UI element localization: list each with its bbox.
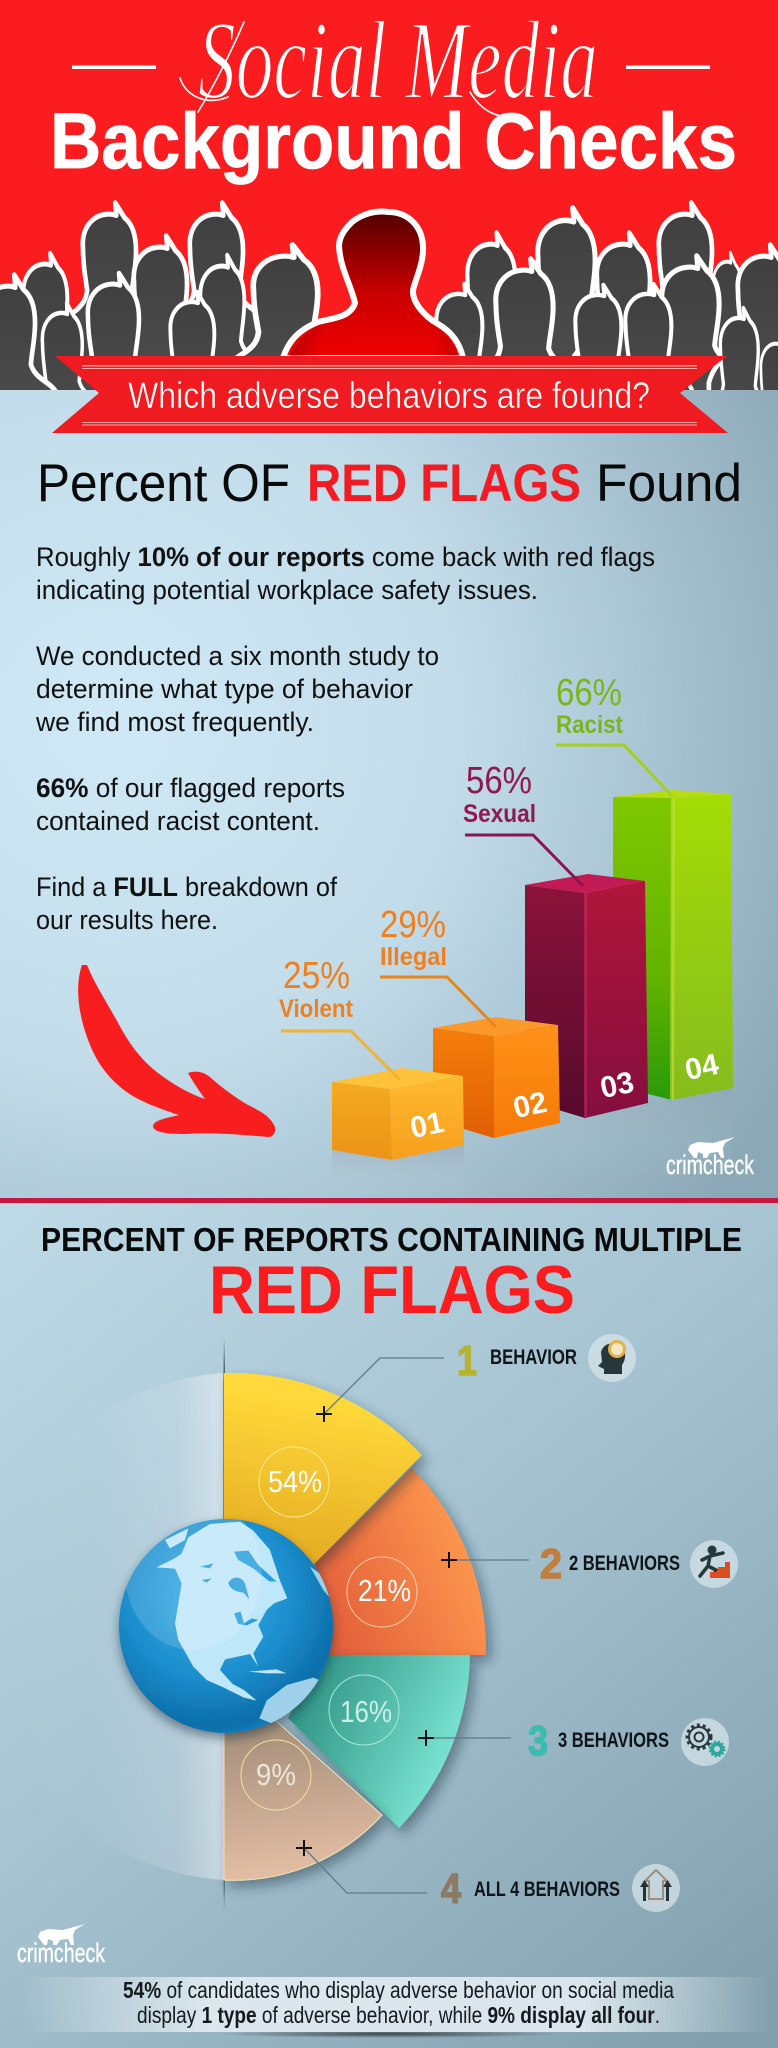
banner ribbon <box>52 356 728 433</box>
heading: red flags: RED FLAGS <box>209 1252 575 1328</box>
slice: 9 percent <box>224 1700 382 1880</box>
bar chart: red flag types <box>279 672 733 1195</box>
heading: percent of red flags found: Percent OF <box>37 454 290 513</box>
intro text block: Roughly 10% of our reports come back with red flags <box>36 542 655 572</box>
pie chart with globe <box>0 1337 486 1910</box>
label: 9 percent <box>241 1740 311 1810</box>
intro text block: determine what type of behavior <box>36 674 413 704</box>
callout: 25% violent: Violent <box>279 995 354 1023</box>
label: 9 percent: 9% <box>256 1757 296 1792</box>
callout: 56% sexual: Sexual <box>463 800 536 828</box>
legend: 2 behaviors: 2 BEHAVIORS <box>569 1552 680 1575</box>
callout: 29% illegal <box>380 904 496 1027</box>
bar reflections <box>332 1088 732 1195</box>
legend: 3 behaviors: 3 <box>528 1717 548 1764</box>
icon: upward arrows <box>632 1864 680 1912</box>
title decorative rules <box>72 66 710 69</box>
heading: percent of red flags found: RED FLAGS <box>307 454 581 513</box>
legend: 1 behavior: BEHAVIOR <box>490 1346 577 1369</box>
callout: 66% racist: Racist <box>556 711 624 739</box>
legend: all 4 behaviors: ALL 4 BEHAVIORS <box>474 1878 620 1901</box>
intro text block: our results here. <box>36 905 218 935</box>
bar 02 illegal <box>433 1017 560 1138</box>
title: Social Media <box>180 0 598 123</box>
bar 04 racist <box>613 790 733 1100</box>
slice: 54 percent <box>224 1373 422 1600</box>
crowd silhouettes <box>0 200 778 390</box>
footer note <box>20 1977 770 2032</box>
intro text block: indicating potential workplace safety issues. <box>36 575 538 605</box>
bar 03 sexual <box>525 874 648 1118</box>
section divider <box>0 1198 778 1203</box>
logo: crimcheck upper <box>666 1137 754 1180</box>
label: 16 percent <box>329 1675 399 1745</box>
slice: 21 percent <box>315 1468 486 1655</box>
logo: crimcheck lower <box>17 1924 105 1968</box>
logo: crimcheck lower: crimcheck <box>17 1938 105 1968</box>
banner text: Which adverse behaviors are found? <box>128 375 650 416</box>
intro text block: Find a FULL breakdown of <box>36 872 337 902</box>
footer note: display 1 type of adverse behavior, while 9% display all four. <box>137 2002 660 2028</box>
label: 21 percent: 21% <box>358 1573 411 1608</box>
callout: 29% illegal: Illegal <box>380 943 447 971</box>
bar 03 sexual: 03 <box>597 1066 637 1105</box>
label: 54 percent: 54% <box>268 1464 322 1499</box>
legend: 3 behaviors <box>418 1717 729 1766</box>
intro text block: contained racist content. <box>36 806 320 836</box>
page background: lower section <box>0 1200 778 2048</box>
intro text block <box>35 542 655 935</box>
icon: gears <box>681 1718 729 1766</box>
legend: 1 behavior: 1 <box>457 1337 477 1384</box>
legend: 1 behavior <box>316 1334 636 1422</box>
heading: percent of red flags found: Found <box>596 454 742 513</box>
callout: 29% illegal: 29% <box>380 904 446 946</box>
page background: upper section <box>0 380 778 1200</box>
legend: 2 behaviors <box>441 1540 738 1588</box>
label: 21 percent <box>347 1557 417 1627</box>
heading: percent of red flags found <box>37 454 742 513</box>
footer note: 54% of candidates who display adverse behavior on social media <box>123 1977 674 2003</box>
intro text block: we find most frequently. <box>35 707 314 737</box>
slice: 16 percent <box>288 1655 470 1828</box>
central red silhouette <box>283 211 463 358</box>
legend: 3 behaviors: 3 BEHAVIORS <box>558 1729 669 1752</box>
callout: 56% sexual <box>463 760 583 886</box>
legend: all 4 behaviors <box>296 1840 680 1912</box>
intro text block: 66% of our flagged reports <box>36 773 345 803</box>
footer band shadow <box>217 2030 557 2038</box>
icon: red hand-drawn arrow <box>78 965 275 1137</box>
callout: 25% violent <box>279 955 400 1080</box>
bar 02 illegal: 02 <box>510 1086 550 1125</box>
centre vertical line <box>224 1337 225 1910</box>
callout: 66% racist <box>556 672 672 796</box>
callout: 66% racist: 66% <box>556 672 622 714</box>
faint left half disc <box>0 1373 224 1880</box>
legend: 2 behaviors: 2 <box>540 1540 562 1587</box>
legend: all 4 behaviors: 4 <box>441 1865 462 1912</box>
globe <box>119 1497 333 1733</box>
bar 01 violent: 01 <box>407 1106 447 1145</box>
bar 04 racist: 04 <box>682 1048 722 1087</box>
callout: 56% sexual: 56% <box>466 760 532 802</box>
intro text block: We conducted a six month study to <box>36 641 439 671</box>
header red panel <box>0 0 778 390</box>
label: 54 percent <box>259 1447 329 1517</box>
callout: 25% violent: 25% <box>283 955 350 997</box>
icon: person climbing stairs <box>690 1540 738 1588</box>
label: 16 percent: 16% <box>340 1694 392 1729</box>
icon: head with coin <box>588 1334 636 1382</box>
bar 01 violent <box>332 1068 464 1160</box>
